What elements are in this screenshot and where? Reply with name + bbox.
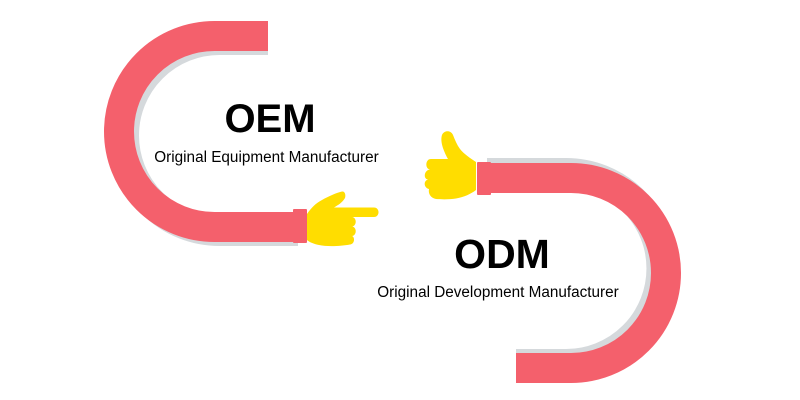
heading: ODM: ODM <box>454 231 550 277</box>
heading: OEM: OEM <box>224 97 316 141</box>
arm shadow: OEM <box>124 40 298 231</box>
icon: thumbs up hand <box>425 131 476 199</box>
panel: OEM arm <box>119 36 378 246</box>
subtitle: OEM: Original Equipment Manufacturer <box>154 149 379 166</box>
icon: pointing hand <box>307 191 378 246</box>
curved arm: OEM <box>119 36 300 227</box>
sleeve cuff: OEM <box>293 209 307 243</box>
panel: ODM arm <box>425 131 666 368</box>
sleeve cuff: ODM <box>477 162 491 195</box>
subtitle: ODM: Original Development Manufacturer <box>377 284 619 301</box>
arm shadow: ODM <box>487 173 661 364</box>
curved arm: ODM <box>477 178 666 368</box>
